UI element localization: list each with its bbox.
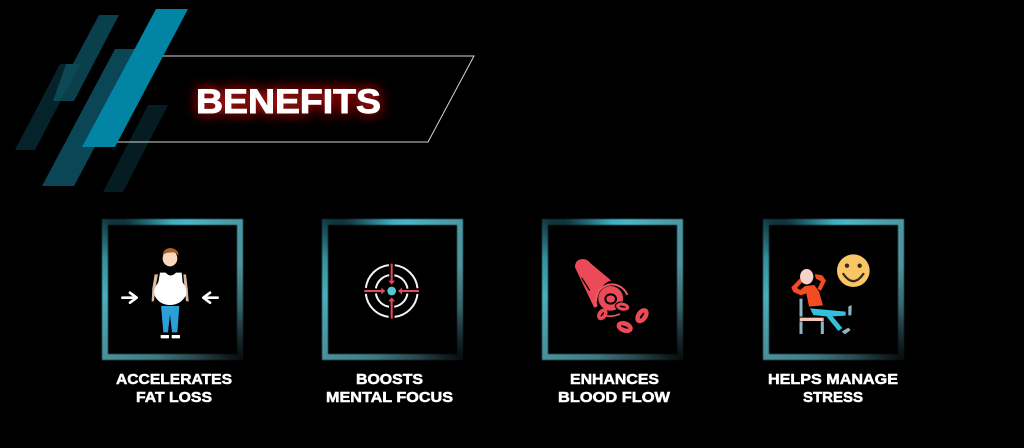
panel: helps manage stress: [762, 218, 905, 406]
panel: boosts mental focus: [321, 218, 464, 406]
gradient frame: [102, 219, 243, 360]
label: accelerates fat loss: FAT LOSS: [136, 390, 212, 406]
label: enhances blood flow: [558, 372, 670, 406]
bright bar: [82, 9, 188, 147]
title: BENEFITS: BENEFITS: [196, 83, 381, 121]
title box outline: [116, 56, 474, 142]
label: accelerates fat loss: [116, 372, 232, 406]
decorative bars: [15, 15, 168, 192]
icon: relaxed person and smiley: [791, 254, 870, 334]
label: boosts mental focus: MENTAL FOCUS: [326, 390, 453, 406]
icon: body with arrows: [121, 248, 219, 338]
gradient frame: [542, 219, 683, 360]
gradient frame: [322, 219, 463, 360]
label: helps manage stress: [768, 372, 898, 406]
label: helps manage stress: STRESS: [803, 390, 863, 406]
gradient frame: [763, 219, 904, 360]
panel: accelerates fat loss: [101, 218, 244, 406]
label: accelerates fat loss: ACCELERATES: [116, 372, 232, 388]
title: BENEFITS: BENEFITS: [196, 83, 381, 121]
panel: enhances blood flow: [541, 218, 684, 406]
label: enhances blood flow: BLOOD FLOW: [558, 390, 670, 406]
label: enhances blood flow: ENHANCES: [570, 372, 659, 388]
label: helps manage stress: HELPS MANAGE: [768, 372, 898, 388]
label: boosts mental focus: BOOSTS: [356, 372, 423, 388]
header: decorative bars, title box and title: [15, 9, 475, 192]
icon: target: [364, 264, 419, 319]
label: boosts mental focus: [326, 372, 453, 406]
icon: blood vessel and cells: [575, 259, 649, 333]
